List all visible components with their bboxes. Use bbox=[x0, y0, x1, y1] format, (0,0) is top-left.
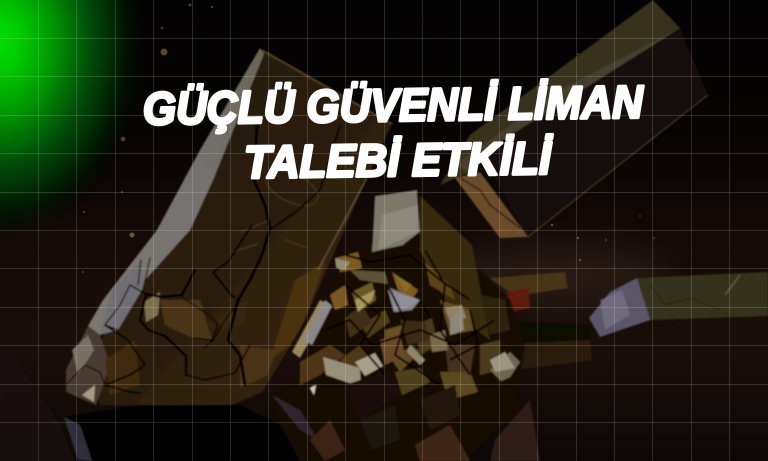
bright shards bbox=[323, 357, 361, 387]
dark lower reflection bbox=[0, 348, 300, 461]
silver bevel bbox=[88, 48, 264, 335]
crack lines in pile bbox=[325, 250, 495, 385]
title line 2: TALEBİ ETKİLİ bbox=[244, 132, 553, 188]
upper right gold bar bbox=[440, 0, 708, 238]
green glow bbox=[0, 0, 160, 250]
thin edge line bbox=[318, 178, 367, 270]
lit facets bbox=[144, 292, 160, 322]
title bbox=[143, 76, 644, 188]
thin gold edge along top bbox=[262, 50, 392, 124]
bar face bbox=[90, 50, 392, 406]
main cracked gold bar bbox=[66, 48, 392, 406]
shattered gold pile bbox=[270, 190, 540, 461]
top light chunk bbox=[372, 190, 420, 252]
lower right gold bar bbox=[589, 272, 768, 337]
silver fragments bbox=[100, 262, 145, 335]
dark shards bbox=[345, 370, 400, 420]
olive right slope bbox=[420, 196, 490, 340]
distant gold debris bbox=[470, 272, 592, 372]
engraved stamp bbox=[232, 163, 323, 252]
gold dust specks bbox=[82, 4, 655, 273]
crack lines bbox=[66, 125, 340, 393]
left shattered tip bbox=[66, 326, 110, 405]
warm haze behind pile bbox=[450, 247, 670, 303]
title line 1: GÜÇLÜ GÜVENLİ LİMAN bbox=[143, 76, 644, 134]
gold fragments bbox=[335, 252, 362, 272]
